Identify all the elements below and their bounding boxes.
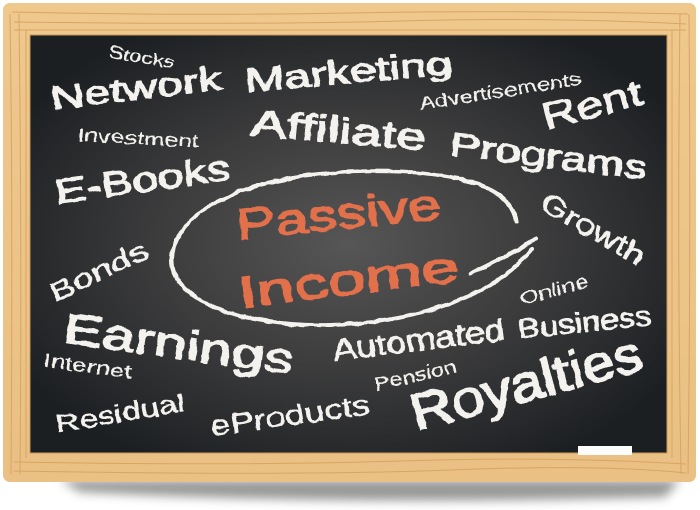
chalk oval — [172, 171, 536, 325]
chalkboard — [30, 35, 667, 453]
word: Stocks: Stocks — [107, 42, 176, 72]
word: Pension: Pension — [372, 357, 459, 396]
word: Earnings: Earnings — [61, 304, 297, 383]
word: Advertisements: Advertisements — [417, 69, 583, 114]
word: Network: Network — [48, 59, 224, 117]
word: Rent: Rent — [537, 71, 648, 138]
word: Bonds: Bonds — [44, 235, 153, 308]
word: eProducts: eProducts — [209, 389, 371, 442]
piece of chalk — [578, 446, 632, 455]
drop shadow — [60, 480, 680, 501]
word: Internet: Internet — [42, 350, 133, 382]
chalk words — [42, 42, 653, 443]
heading: Passive Income — [234, 180, 462, 318]
word: Affiliate: Affiliate — [249, 102, 428, 158]
word: Marketing: Marketing — [243, 44, 454, 99]
word: E-Books: E-Books — [53, 149, 232, 212]
word: Automated: Automated — [331, 312, 507, 368]
word: Investment: Investment — [77, 125, 200, 151]
heading: Passive Income: Passive — [234, 180, 443, 250]
heading: Passive Income: Income — [235, 242, 462, 318]
word: Royalties: Royalties — [404, 325, 649, 443]
word: Business: Business — [516, 300, 653, 345]
word: Online: Online — [518, 271, 591, 311]
word: Growth: Growth — [535, 186, 651, 271]
word: Programs: Programs — [448, 125, 649, 186]
word: Residual: Residual — [53, 389, 187, 439]
